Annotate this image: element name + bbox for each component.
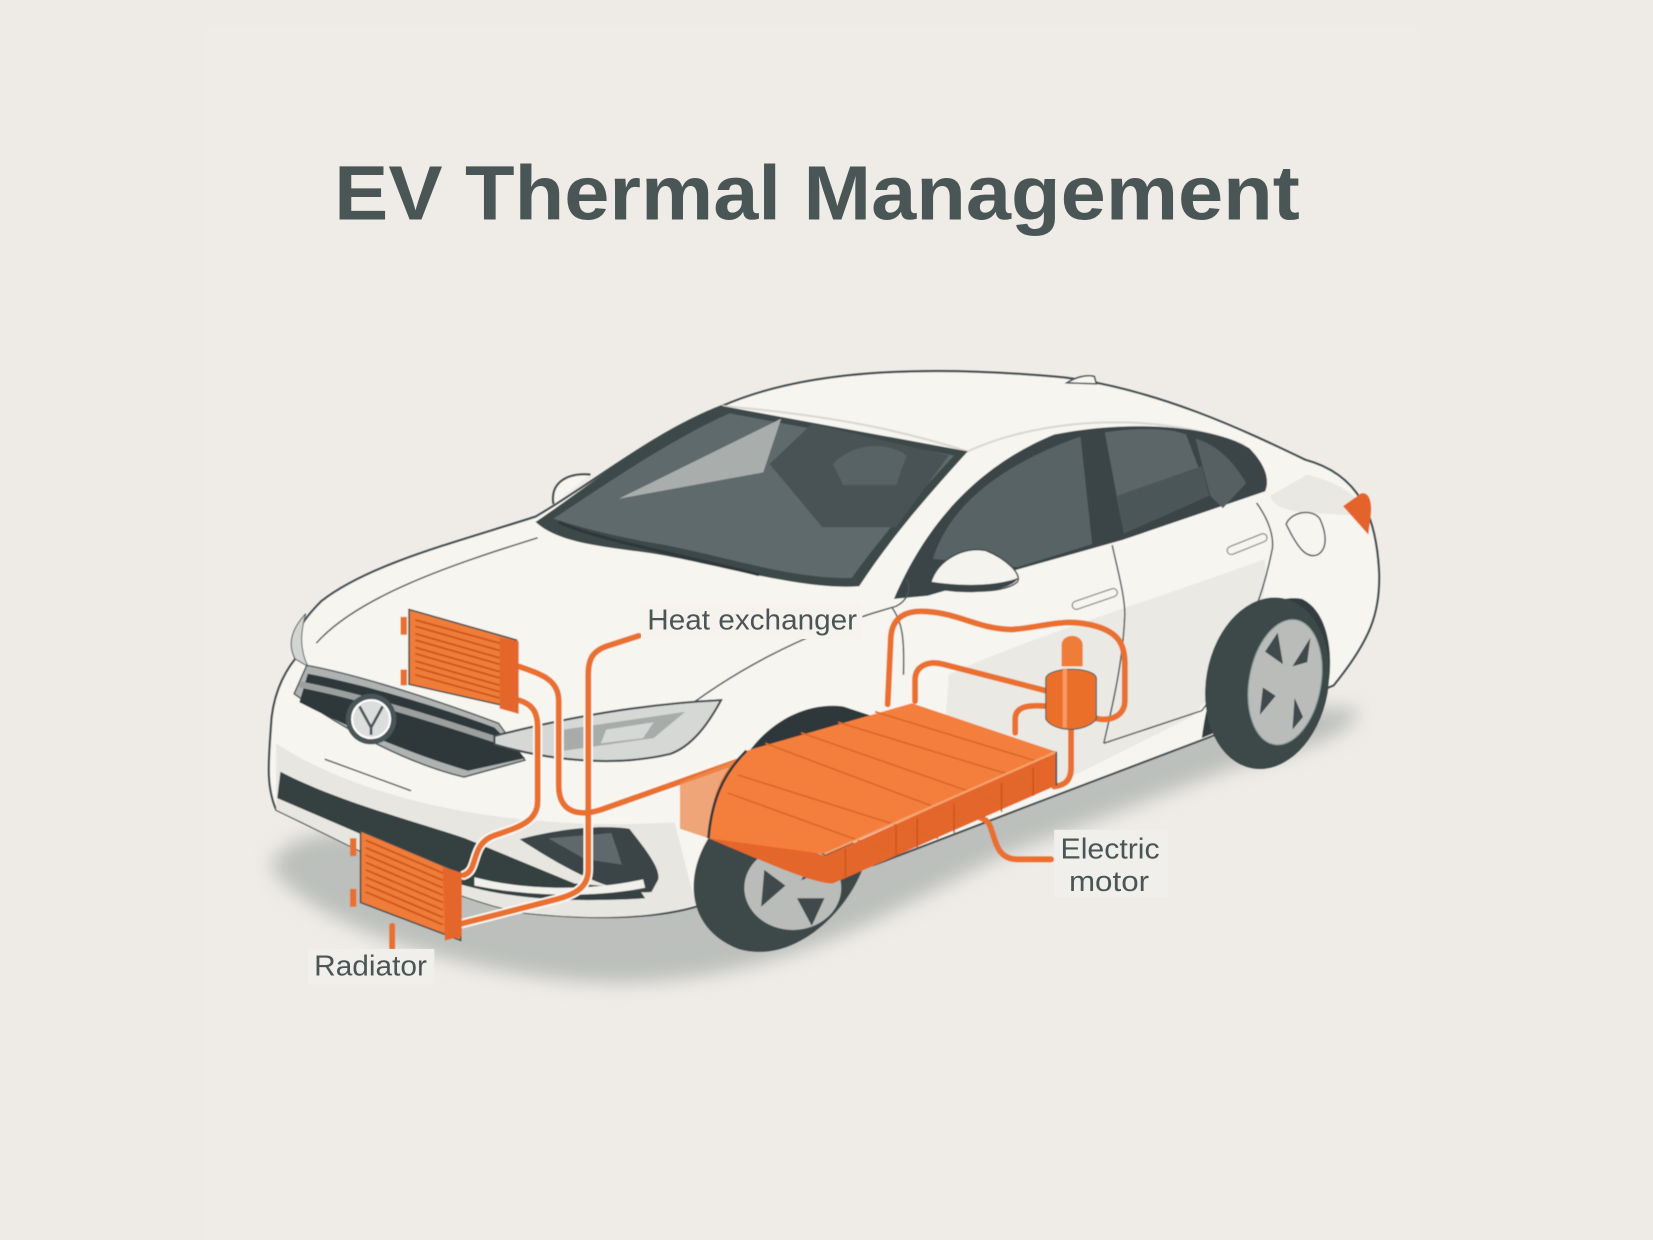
headlight bbox=[494, 700, 721, 761]
front fender arch bbox=[738, 706, 875, 801]
front wheel bbox=[694, 812, 862, 952]
antenna fin bbox=[1067, 376, 1096, 384]
heat exchanger bbox=[404, 609, 519, 714]
front grille bbox=[294, 665, 525, 777]
radiator leader bbox=[389, 926, 395, 949]
cooling pipes bbox=[462, 611, 1125, 924]
car illustration bbox=[269, 371, 1379, 983]
car body bbox=[269, 371, 1379, 917]
radiator bbox=[353, 831, 462, 940]
label: heat exchanger: Heat exchanger bbox=[647, 604, 857, 636]
taillight bbox=[1343, 493, 1371, 535]
far mirror bbox=[553, 474, 590, 504]
body shading bbox=[276, 475, 1368, 917]
label: radiator: Radiator bbox=[314, 950, 427, 982]
battery pack bbox=[680, 703, 1056, 884]
roof highlight edge bbox=[722, 406, 1244, 451]
lower bumper intake bbox=[277, 759, 658, 900]
side mirror bbox=[931, 550, 1018, 592]
windshield bbox=[536, 406, 968, 587]
label: electric motor: Electric bbox=[1061, 833, 1160, 865]
emblem bbox=[346, 694, 396, 744]
title: EV Thermal Management bbox=[334, 150, 1300, 236]
label: electric motor bbox=[1054, 830, 1168, 898]
left light edge bbox=[291, 614, 308, 666]
door seams and handles bbox=[316, 503, 1325, 743]
pump cylinder bbox=[1046, 636, 1096, 729]
ground shadow bbox=[270, 706, 1358, 983]
side windows bbox=[894, 426, 1267, 599]
label: electric motor: motor bbox=[1069, 866, 1149, 898]
rear wheel bbox=[1192, 588, 1342, 779]
